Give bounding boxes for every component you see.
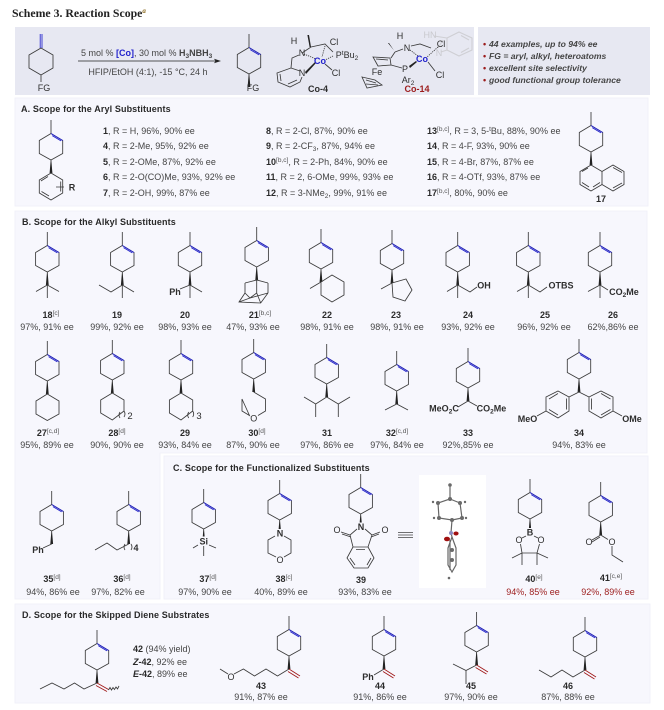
compound 18: 97%, 91% ee bbox=[20, 322, 74, 332]
compound 37 bbox=[178, 489, 232, 597]
compound 37: [d] bbox=[209, 574, 217, 581]
catalyst Co-14: Fe bbox=[372, 67, 382, 77]
compound 45 bbox=[444, 612, 498, 702]
arrow with conditions: NBH bbox=[189, 48, 209, 58]
results list column 3: [b,c] bbox=[437, 188, 449, 195]
results list column 2: [b,c] bbox=[276, 157, 288, 164]
compound 41: O bbox=[585, 537, 593, 547]
panel: D skipped diene substrates bbox=[15, 604, 650, 703]
compound 35: 35 bbox=[43, 574, 53, 584]
bullet list bbox=[483, 39, 621, 85]
compound 28: 90%, 90% ee bbox=[90, 440, 144, 450]
results list column 3: 17 bbox=[427, 188, 437, 198]
catalyst Co-14: Cl bbox=[436, 70, 444, 80]
catalyst Co-4: P bbox=[336, 50, 342, 60]
compound 22: 22 bbox=[322, 310, 332, 320]
compound 41 bbox=[581, 482, 635, 597]
arrow with conditions: HFIP/EtOH (4:1), -15 °C, 24 h bbox=[88, 67, 208, 77]
panel: highlights bbox=[478, 27, 650, 95]
catalyst Co-4: N bbox=[299, 68, 305, 78]
compound 24 bbox=[441, 232, 495, 332]
compound 44: 91%, 86% ee bbox=[353, 692, 407, 702]
compound 38: N bbox=[277, 528, 283, 538]
compound 46: 87%, 88% ee bbox=[541, 692, 595, 702]
compound 39: 93%, 83% ee bbox=[338, 587, 392, 597]
compound 26: 26 bbox=[608, 310, 618, 320]
compound 32 bbox=[370, 351, 424, 450]
compound 43: O bbox=[227, 672, 235, 682]
compound 26: CO bbox=[609, 287, 623, 297]
compound 28 bbox=[90, 340, 144, 450]
results list column 3: , 80%, 90% ee bbox=[449, 188, 508, 198]
compound 36: 4 bbox=[133, 543, 139, 553]
compound 44 bbox=[353, 616, 407, 702]
compound 34: MeO bbox=[518, 414, 537, 424]
title: a bbox=[142, 7, 146, 15]
compound 39: N bbox=[358, 522, 364, 532]
catalyst Co-14: P bbox=[402, 64, 408, 74]
catalyst Co-14: Ar bbox=[402, 75, 411, 85]
compound 40 bbox=[506, 479, 560, 597]
compound 40: 94%, 85% ee bbox=[506, 587, 560, 597]
bullet list: • bbox=[483, 39, 486, 49]
results list column 2: , 87%, 94% ee bbox=[316, 141, 375, 151]
compound 36 bbox=[91, 491, 145, 597]
compound 29 bbox=[158, 340, 212, 450]
compound 29: 93%, 84% ee bbox=[158, 440, 212, 450]
compound 35: 94%, 86% ee bbox=[26, 587, 80, 597]
results list column 2: 12, R = 3-NMe bbox=[266, 188, 325, 198]
compound 38: 40%, 89% ee bbox=[254, 587, 308, 597]
compound 21: [b,c] bbox=[259, 310, 271, 317]
compound 21: 47%, 93% ee bbox=[226, 322, 280, 332]
compound 29: 3 bbox=[196, 411, 202, 422]
compound 37: Si bbox=[199, 536, 208, 546]
compound 38: [c] bbox=[286, 574, 293, 581]
results list column 2 bbox=[266, 126, 393, 200]
compound 36: 36 bbox=[113, 574, 123, 584]
compound 36: 97%, 82% ee bbox=[91, 587, 145, 597]
catalyst Co-4: Cl bbox=[330, 37, 338, 47]
panel: B alkyl substituents bbox=[15, 211, 647, 599]
bullet list: • bbox=[483, 63, 486, 73]
results list column 1: 6, R = 2-O(CO)Me, 93%, 92% ee bbox=[103, 172, 235, 182]
compound 45: 45 bbox=[466, 681, 476, 691]
aryl general structure bbox=[39, 120, 76, 200]
results list column 3: 13 bbox=[427, 126, 437, 136]
compound 27: 27 bbox=[37, 428, 47, 438]
heading D: D. Scope for the Skipped Diene Substrates bbox=[22, 610, 209, 620]
compound 31 bbox=[300, 344, 354, 450]
compound 25: OTBS bbox=[548, 280, 574, 290]
compound 32: 97%, 84% ee bbox=[370, 440, 424, 450]
compound 23: 23 bbox=[391, 310, 401, 320]
compound 46 bbox=[539, 617, 597, 702]
compound 33: 2 bbox=[490, 408, 494, 416]
title: Scheme 3. Reaction Scope bbox=[12, 6, 142, 20]
compound 27: [c,d] bbox=[47, 428, 59, 435]
compound 30 bbox=[226, 339, 280, 450]
catalyst Co-4: 2 bbox=[355, 55, 359, 62]
compound 23 bbox=[370, 230, 424, 332]
bullet list: 44 examples, up to 94% ee bbox=[488, 39, 598, 49]
compound 42 results: E-42, 89% ee bbox=[133, 669, 188, 679]
compound 42 results: 42 (94% yield) bbox=[133, 644, 191, 654]
compound 27 bbox=[20, 341, 74, 450]
compound 33 bbox=[429, 348, 506, 450]
compound 41: 41 bbox=[600, 573, 610, 583]
compound 35: Ph bbox=[32, 545, 44, 555]
catalyst Co-14: N bbox=[404, 43, 410, 53]
heading C: C. Scope for the Functionalized Substituents bbox=[173, 463, 370, 473]
catalyst Co-14: Co bbox=[416, 54, 428, 64]
compound 28: 2 bbox=[127, 411, 133, 422]
product: FG bbox=[247, 83, 259, 93]
compound 34: 34 bbox=[574, 428, 584, 438]
heading A: A. Scope for the Aryl Substituents bbox=[21, 104, 171, 114]
compound 33: 2 bbox=[449, 408, 453, 416]
results list column 2: 10 bbox=[266, 157, 276, 167]
compound 21 bbox=[226, 227, 280, 332]
compound 23: 98%, 91% ee bbox=[370, 322, 424, 332]
catalyst Co-14: N bbox=[436, 48, 442, 58]
compound 19: 19 bbox=[112, 310, 122, 320]
catalyst Co-4: t bbox=[342, 50, 344, 57]
compound 31: 31 bbox=[322, 428, 332, 438]
results list column 1: 7, R = 2-OH, 99%, 87% ee bbox=[103, 188, 210, 198]
compound 25: 25 bbox=[540, 310, 550, 320]
catalyst Co-14: Cl bbox=[437, 39, 445, 49]
compound 20: Ph bbox=[169, 287, 181, 297]
compound 20: 98%, 93% ee bbox=[158, 322, 212, 332]
compound 19: 99%, 92% ee bbox=[90, 322, 144, 332]
crystal structure image bbox=[419, 475, 486, 588]
compound 45: 97%, 90% ee bbox=[444, 692, 498, 702]
compound 41: [c,e] bbox=[610, 573, 622, 580]
catalyst Co-4: Bu bbox=[344, 50, 355, 60]
icon: starting material bbox=[29, 34, 53, 93]
compound 40: B bbox=[527, 528, 534, 538]
arrow with conditions: 3 bbox=[186, 53, 190, 60]
results list column 3: , R = 3, 5- bbox=[449, 126, 489, 136]
catalyst Co-14 bbox=[362, 30, 472, 94]
catalyst Co-14: Co-14 bbox=[404, 84, 430, 94]
compound 26 bbox=[587, 232, 639, 332]
arrow with conditions bbox=[78, 48, 221, 77]
compound 38: O bbox=[276, 555, 284, 565]
panel: C functionalized substituents bbox=[164, 456, 648, 599]
compound 24: 93%, 92% ee bbox=[441, 322, 495, 332]
compound 17: 17 bbox=[596, 194, 606, 204]
compound 36: [d] bbox=[123, 574, 131, 581]
compound 22 bbox=[300, 229, 354, 332]
compound 43 bbox=[220, 616, 301, 702]
arrow with conditions: 3 bbox=[209, 53, 213, 60]
icon: starting material: FG bbox=[38, 83, 50, 93]
compound 40: [e] bbox=[535, 574, 543, 581]
catalyst Co-14: HN bbox=[424, 30, 436, 40]
catalyst Co-4: H bbox=[291, 36, 297, 46]
compound 40: O bbox=[515, 535, 523, 545]
compound 25 bbox=[517, 232, 574, 332]
compound 38: 38 bbox=[276, 574, 286, 584]
compound 20: 20 bbox=[180, 310, 190, 320]
compound 37: 97%, 90% ee bbox=[178, 587, 232, 597]
results list column 3: 16, R = 4-OTf, 93%, 87% ee bbox=[427, 172, 540, 182]
catalyst Co-4 bbox=[277, 35, 359, 94]
compound 19 bbox=[90, 232, 144, 332]
compound 30: [d] bbox=[258, 428, 266, 435]
compound 34: 94%, 83% ee bbox=[552, 440, 606, 450]
compound 34 bbox=[518, 339, 642, 450]
bullet list: • bbox=[483, 75, 486, 85]
compound 30: 30 bbox=[248, 428, 258, 438]
equivalence symbol bbox=[398, 532, 413, 538]
bullet list: good functional group tolerance bbox=[488, 75, 621, 85]
catalyst Co-14: H bbox=[397, 31, 403, 41]
results list column 1 bbox=[103, 126, 235, 198]
bullet list: FG = aryl, alkyl, heteroatoms bbox=[489, 51, 606, 61]
compound 27: 95%, 89% ee bbox=[20, 440, 74, 450]
compound 37: 37 bbox=[199, 574, 209, 584]
results list column 2: 8, R = 2-Cl, 87%, 90% ee bbox=[266, 126, 368, 136]
compound 18: [c] bbox=[53, 310, 60, 317]
results list column 2: 2 bbox=[325, 193, 329, 200]
compound 33: Me bbox=[494, 404, 506, 414]
compound 24: 24 bbox=[463, 310, 473, 320]
catalyst Co-4: Co-4 bbox=[308, 84, 328, 94]
catalyst Co-4: Co bbox=[314, 56, 326, 66]
compound 39: 39 bbox=[356, 575, 366, 585]
results list column 2: 9, R = 2-CF bbox=[266, 141, 313, 151]
results list column 2: , 99%, 91% ee bbox=[328, 188, 387, 198]
compound 26: Me bbox=[626, 287, 639, 297]
compound 35: [d] bbox=[53, 574, 61, 581]
compound 21: 21 bbox=[249, 310, 259, 320]
compound 33: 33 bbox=[463, 428, 473, 438]
compound 46: 46 bbox=[563, 681, 573, 691]
panel: A aryl substituents bbox=[15, 98, 648, 206]
compound 30: O bbox=[250, 414, 257, 424]
compound 41: O bbox=[608, 537, 616, 547]
compound 29: 29 bbox=[180, 428, 190, 438]
compound 40: O bbox=[537, 535, 545, 545]
results list column 3: 14, R = 4-F, 93%, 90% ee bbox=[427, 141, 530, 151]
compound 33: CO bbox=[477, 404, 490, 414]
compound 35 bbox=[26, 491, 80, 597]
arrow with conditions: 5 mol % [Co], 30 mol % H bbox=[81, 48, 186, 58]
compound 28: [d] bbox=[118, 428, 126, 435]
results list column 1: 1, R = H, 96%, 90% ee bbox=[103, 126, 195, 136]
results list column 3: t bbox=[489, 126, 491, 133]
aryl general structure: R bbox=[69, 182, 76, 192]
compound 39: O bbox=[381, 525, 389, 535]
compound 38 bbox=[254, 480, 308, 597]
product bbox=[237, 34, 261, 93]
compound 44: 44 bbox=[375, 681, 385, 691]
heading B: B. Scope for the Alkyl Substituents bbox=[22, 217, 176, 227]
results list column 2: , R = 2-Ph, 84%, 90% ee bbox=[288, 157, 388, 167]
compound 33: MeO bbox=[429, 404, 449, 414]
results list column 1: 4, R = 2-Me, 95%, 92% ee bbox=[103, 141, 209, 151]
compound 41: 92%, 89% ee bbox=[581, 587, 635, 597]
compound 32: 32 bbox=[386, 428, 396, 438]
catalyst Co-4: Cl bbox=[332, 68, 340, 78]
results list column 2: 11, R = 2, 6-OMe, 99%, 93% ee bbox=[266, 172, 393, 182]
compound 26: 62%,86% ee bbox=[587, 322, 639, 332]
compound 39 bbox=[333, 474, 392, 597]
compound 39: O bbox=[333, 525, 341, 535]
compound 42 bbox=[40, 630, 119, 692]
compound 40: 40 bbox=[525, 574, 535, 584]
compound 28: 28 bbox=[108, 428, 118, 438]
results list column 1: 5, R = 2-OMe, 87%, 92% ee bbox=[103, 157, 216, 167]
results list column 3 bbox=[427, 126, 560, 198]
results list column 2: 3 bbox=[313, 146, 317, 153]
compound 43: 91%, 87% ee bbox=[234, 692, 288, 702]
compound 42 results: Z-42, 92% ee bbox=[132, 657, 187, 667]
compound 34: OMe bbox=[622, 414, 642, 424]
compound 32: [c,d] bbox=[396, 428, 408, 435]
compound 20 bbox=[158, 232, 212, 332]
compound 42 results bbox=[132, 644, 191, 679]
catalyst Co-14: 2 bbox=[411, 80, 415, 87]
bullet list: • bbox=[483, 51, 486, 61]
results list column 3: Bu, 88%, 90% ee bbox=[491, 126, 560, 136]
compound 26: 2 bbox=[623, 292, 627, 299]
results list column 3: 15, R = 4-Br, 87%, 87% ee bbox=[427, 157, 534, 167]
compound 31: 97%, 86% ee bbox=[300, 440, 354, 450]
catalyst Co-4: N bbox=[299, 48, 305, 58]
compound 22: 98%, 91% ee bbox=[300, 322, 354, 332]
compound 44: Ph bbox=[362, 672, 374, 682]
panel: reaction scheme bbox=[15, 27, 474, 95]
compound 30: 87%, 90% ee bbox=[226, 440, 280, 450]
compound 17 bbox=[579, 112, 624, 204]
compound 25: 96%, 92% ee bbox=[517, 322, 571, 332]
results list column 3: [b,c] bbox=[437, 126, 449, 133]
compound 18 bbox=[20, 232, 74, 332]
compound 43: 43 bbox=[256, 681, 266, 691]
compound 33: 92%,85% ee bbox=[442, 440, 494, 450]
compound 24: OH bbox=[477, 280, 491, 290]
compound 33: C bbox=[452, 404, 459, 414]
bullet list: excellent site selectivity bbox=[489, 63, 588, 73]
compound 18: 18 bbox=[43, 310, 53, 320]
